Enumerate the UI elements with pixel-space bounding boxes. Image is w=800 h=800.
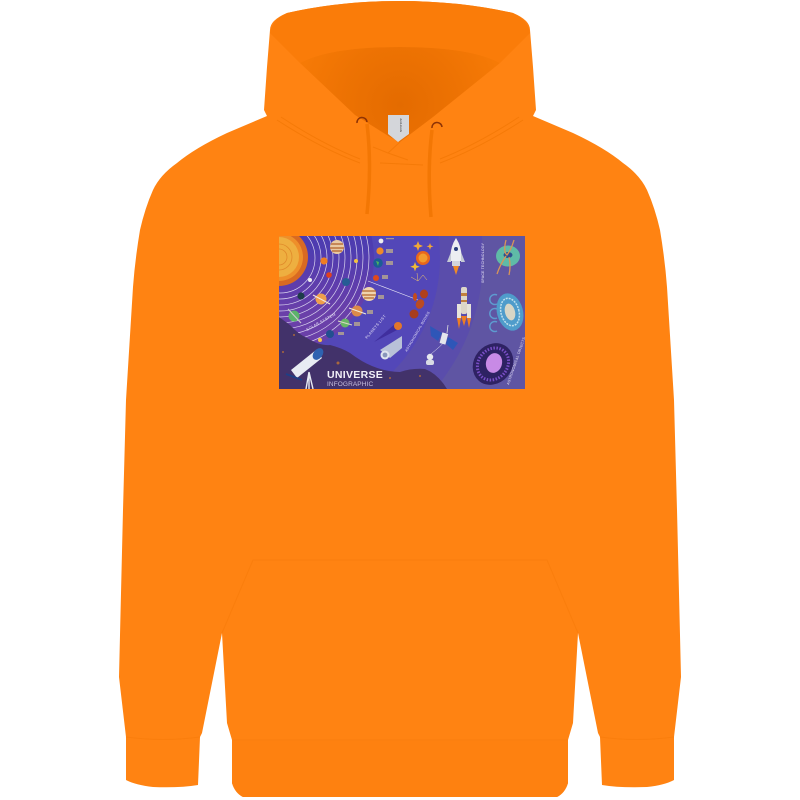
space technology (426, 238, 485, 365)
solar system label: SOLAR SYSTEM (306, 312, 336, 332)
astronaut (426, 344, 443, 365)
printed universe infographic (279, 236, 525, 389)
hood roll (270, 1, 530, 63)
neck label: JustHoods (399, 118, 403, 133)
rocket two (457, 287, 471, 329)
hoodie body silhouette (119, 1, 681, 797)
rocket one (447, 238, 465, 275)
bodies label: ASTRONOMICAL BODIES (404, 310, 431, 352)
hoodie (119, 1, 681, 797)
neck label (388, 115, 409, 142)
eyelets (357, 117, 442, 128)
hill stars (282, 334, 421, 379)
objects label: ASTRONOMICAL OBJECTS (506, 336, 526, 385)
planets label: PLANETS LIST (365, 314, 387, 340)
telescope (286, 346, 326, 389)
orange star (413, 241, 423, 251)
spiral galaxy (496, 293, 524, 331)
small arcs (490, 294, 497, 332)
astronomical objects (472, 240, 525, 385)
green disc galaxy (496, 240, 520, 275)
title (328, 371, 382, 386)
silver comet (380, 336, 402, 358)
hem shading (232, 741, 568, 797)
hood inner lining (300, 47, 500, 142)
title: UNIVERSE (327, 369, 383, 381)
planet list (379, 239, 383, 243)
orbits (279, 236, 370, 342)
solar planets (330, 240, 344, 254)
satellite (430, 325, 458, 350)
solar system (279, 236, 370, 342)
planet captions (338, 238, 394, 335)
body seams and pocket (126, 560, 674, 740)
technology label: SPACE TECHNOLOGY (481, 242, 485, 283)
dark hills (279, 317, 447, 389)
title: INFOGRAPHIC (327, 381, 373, 388)
sun (279, 236, 308, 286)
planets panel (318, 238, 418, 342)
print background bands (441, 236, 525, 389)
guide line (368, 281, 418, 300)
orange comet (375, 325, 397, 342)
collar seams (277, 117, 523, 165)
astronomical bodies (374, 241, 433, 360)
asteroids (420, 290, 428, 298)
drawstrings (367, 124, 432, 217)
constellation (411, 273, 427, 281)
purple galaxy (472, 343, 514, 385)
